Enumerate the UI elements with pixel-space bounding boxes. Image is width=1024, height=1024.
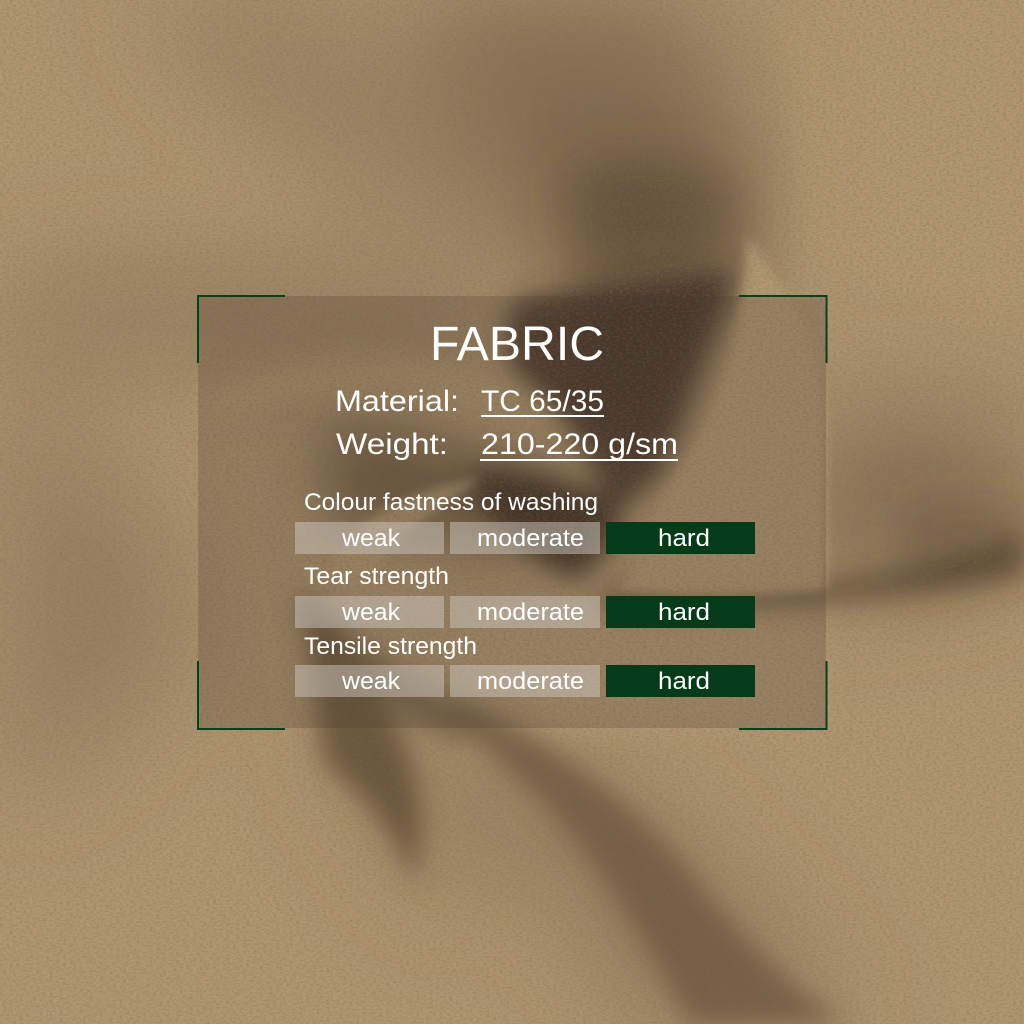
deep folds	[320, 156, 1024, 590]
rating: tear strength: hard	[658, 599, 710, 626]
spec: material: TC 65/35	[481, 385, 604, 418]
title: FABRIC	[430, 318, 604, 371]
panel: translucent overlay	[198, 296, 826, 728]
rating: tensile strength: moderate	[477, 668, 584, 695]
rating: colour fastness of washing: hard	[658, 525, 710, 552]
lit fabric folds	[330, 235, 826, 596]
rating: colour fastness of washing: weak	[341, 525, 401, 552]
rating: colour fastness of washing	[295, 489, 755, 554]
rating: tensile strength: weak	[341, 668, 401, 695]
rating: tear strength: weak	[341, 599, 401, 626]
rating: tear strength: Tear strength	[304, 563, 449, 590]
rating: colour fastness of washing: moderate	[477, 525, 584, 552]
spec: weight	[336, 428, 678, 461]
rating: tear strength: moderate	[477, 599, 584, 626]
rating: tensile strength: hard	[658, 668, 710, 695]
rating: colour fastness of washing: Colour fastness of washing	[304, 489, 598, 516]
rating: tensile strength	[295, 633, 755, 697]
rating: tensile strength: Tensile strength	[304, 633, 477, 660]
spec: weight: 210-220 g/sm	[481, 428, 678, 461]
corner brackets	[198, 296, 826, 729]
spec: material	[335, 385, 604, 418]
spec: material: Material:	[335, 385, 459, 418]
rating: tear strength	[295, 563, 755, 628]
spec: weight: Weight:	[336, 428, 448, 461]
